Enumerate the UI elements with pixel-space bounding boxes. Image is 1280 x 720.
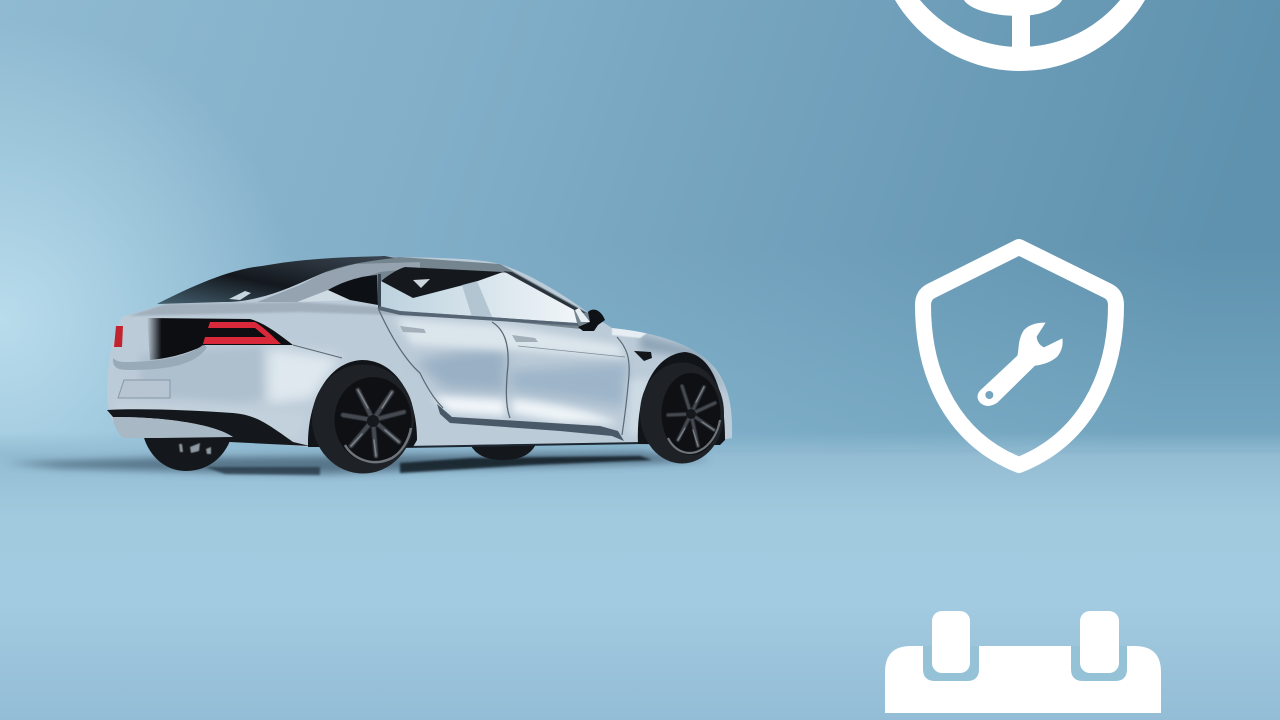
side mirror	[575, 308, 605, 331]
left tab gap	[923, 646, 979, 681]
lower sill line	[405, 442, 640, 448]
quarter window	[328, 275, 378, 305]
ground shadow	[5, 452, 712, 475]
far front wheel	[470, 444, 536, 460]
tail trunk lip	[113, 345, 207, 370]
body reflections	[115, 257, 730, 440]
door handles	[400, 326, 538, 342]
car	[5, 256, 732, 475]
background floor	[0, 432, 1280, 720]
car body	[107, 257, 732, 447]
right tab	[1080, 611, 1119, 673]
plate recess	[118, 380, 170, 398]
far rear wheel	[143, 434, 232, 471]
icon: shield with wrench	[923, 247, 1116, 465]
icon: steering wheel	[874, 0, 1166, 71]
left tab	[932, 611, 970, 673]
right tab gap	[1071, 646, 1127, 681]
rear bumper	[107, 409, 310, 446]
dark roof glass	[157, 256, 395, 304]
background wall	[0, 0, 1280, 460]
side vent	[634, 351, 652, 361]
side window	[378, 267, 586, 326]
door lines	[293, 308, 629, 435]
shield outline	[923, 247, 1116, 465]
tail panel	[147, 318, 293, 360]
wrench	[977, 323, 1063, 406]
left tail light	[114, 326, 123, 347]
icon: calendar base with tabs	[885, 611, 1161, 713]
rear wheel	[308, 360, 417, 474]
front wheel	[638, 352, 725, 464]
calendar body	[885, 646, 1161, 713]
tail light	[203, 322, 281, 344]
side sill stripe	[437, 404, 624, 441]
